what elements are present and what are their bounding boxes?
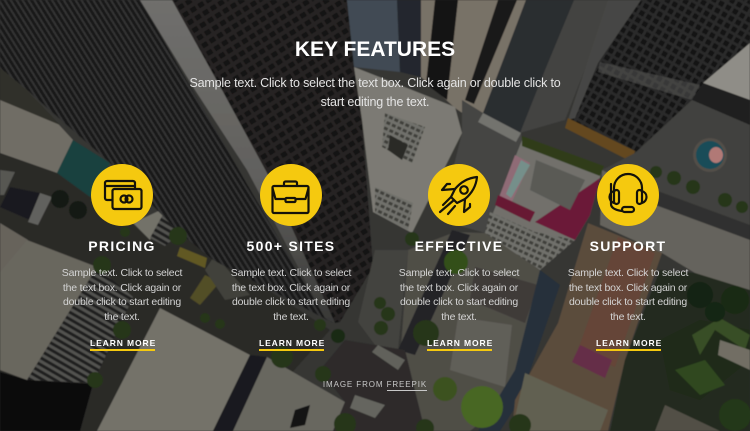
image credit: IMAGE FROM FREEPIK [323,380,427,389]
body text: the text. [610,311,646,323]
body text: double click to start editing [63,296,181,308]
link [596,336,661,351]
body text: the text box. Click again or [232,282,350,294]
greenery [610,270,750,431]
feature: support [568,164,688,351]
pink roof building [485,140,602,270]
body text: Sample text. Click to select [62,267,182,279]
body text: the text. [441,311,477,323]
intro text: start editing the text. [321,94,429,108]
heading: SUPPORT [590,238,666,254]
middle light building [354,67,462,233]
body text: the text box. Click again or [569,282,687,294]
icon: headset [597,164,659,226]
body text: double click to start editing [400,296,518,308]
heading: 500+ SITES [247,238,335,254]
body text: the text box. Click again or [63,282,181,294]
road bottom centre [320,340,425,431]
diagonal light road [600,170,750,300]
intro text: Sample text. Click to select the text box. Click again or double click to [189,76,561,90]
top middle towers [347,0,400,72]
body text: Sample text. Click to select [568,267,688,279]
body text [62,267,182,323]
bottom right building [512,223,662,431]
feature: effective [399,164,520,351]
link [90,336,155,351]
lot and road [395,232,540,431]
crossing [177,247,207,268]
body text: double click to start editing [569,296,687,308]
feature: pricing [62,164,182,351]
body text: the text. [273,311,309,323]
link: LEARN MORE [596,338,662,348]
heading: EFFECTIVE [415,238,503,254]
plaza [602,100,750,233]
icon: briefcase [260,164,322,226]
link [259,336,324,351]
left lower building [0,223,28,278]
icon: rocket [428,164,490,226]
icon: credit cards [91,164,153,226]
body text: Sample text. Click to select [399,267,519,279]
body text [568,267,688,323]
title: KEY FEATURES [295,38,455,61]
left roofs and road [0,68,73,173]
body text: the text box. Click again or [400,282,518,294]
body text [399,267,520,323]
link: LEARN MORE [90,338,156,348]
road [483,0,574,133]
link: LEARN MORE [259,338,325,348]
body text: Sample text. Click to select [231,267,351,279]
bottom buildings [97,308,250,431]
main tower [0,0,333,323]
link: LEARN MORE [427,338,493,348]
body text: the text. [104,311,140,323]
intro text [189,76,561,108]
right tower [568,0,750,153]
heading: PRICING [88,238,156,254]
body text: double click to start editing [232,296,350,308]
link [427,336,492,351]
body text [231,267,352,323]
trees [51,166,748,431]
feature: 500+ sites [231,164,352,351]
